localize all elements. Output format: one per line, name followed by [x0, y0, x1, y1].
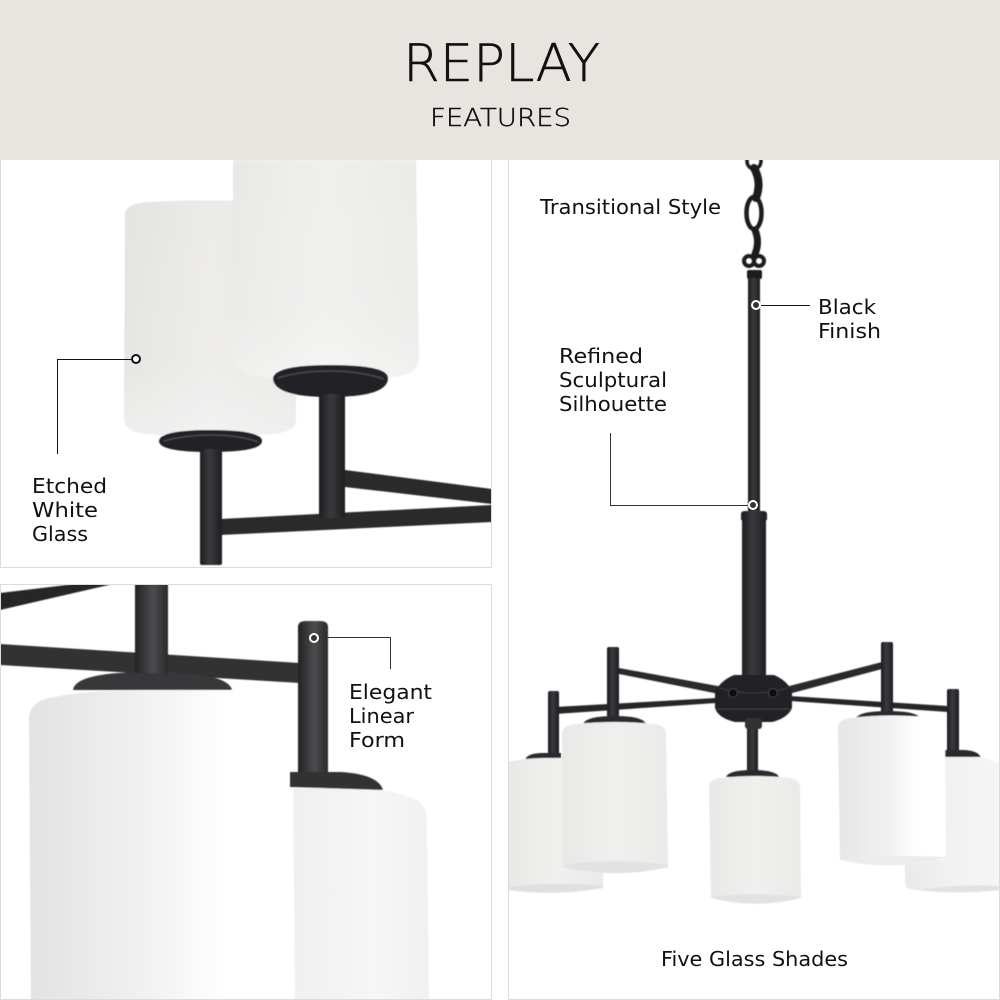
lower stem: [741, 511, 767, 680]
panel: header band: [0, 0, 1000, 160]
center stem: [135, 580, 168, 673]
rear glass shade: [124, 200, 296, 438]
callout line: finish: [761, 304, 810, 306]
left glass shade: [28, 689, 232, 999]
horizontal arm: [0, 644, 300, 683]
far right post and shade: [947, 689, 959, 752]
label: refined sculptural silhouette: Silhouette: [559, 392, 667, 416]
far left post and shade: [548, 691, 559, 755]
inner right post and shade: [881, 642, 893, 713]
hub: [715, 675, 792, 722]
chandelier illustration: [508, 153, 1000, 904]
callout line: form: [319, 638, 390, 669]
label: etched white glass: [32, 474, 107, 546]
label: black finish: Black: [818, 295, 876, 319]
center post and shade: [747, 728, 758, 772]
collar: [747, 270, 762, 279]
front cup: [273, 365, 388, 397]
diagonal rear arm: [0, 584, 113, 610]
label: etched white glass: White: [32, 498, 98, 522]
label: refined sculptural silhouette: Refined: [559, 344, 643, 368]
rear cup: [159, 430, 262, 452]
label: refined sculptural silhouette: Sculptural: [559, 368, 667, 392]
right post: [298, 621, 328, 772]
right cup: [290, 772, 383, 790]
right glass shade: [293, 788, 429, 1000]
lower arm: [218, 505, 492, 535]
label: etched white glass: Etched: [32, 474, 107, 498]
label: five glass shades: Five Glass Shades: [661, 947, 848, 971]
arm sockets: [728, 688, 738, 698]
label: black finish: Finish: [818, 319, 881, 343]
label: elegant linear form: Elegant: [349, 680, 432, 704]
panel: full chandelier: [508, 153, 1000, 1000]
callout dot: silhouette: [749, 501, 757, 509]
upper arm: [345, 470, 492, 504]
label: etched white glass: Glass: [32, 522, 88, 546]
panel: elegant linear form detail: [0, 580, 492, 1000]
inner left post and shade: [607, 647, 619, 717]
front glass shade: [233, 160, 419, 382]
panel: etched white glass detail: [0, 160, 492, 568]
label: elegant linear form: Linear: [349, 704, 415, 728]
chain: [744, 153, 764, 266]
callout dot: finish: [752, 301, 760, 309]
label: elegant linear form: Form: [349, 728, 405, 752]
upper arms: [618, 667, 719, 694]
callout line: silhouette: [610, 433, 748, 506]
subtitle: FEATURES: [430, 103, 571, 132]
label: transitional style: Transitional Style: [539, 195, 721, 219]
far arms: [555, 698, 716, 714]
label: black finish: [818, 295, 881, 343]
label: elegant linear form: [349, 680, 432, 752]
callout line: glass: [58, 360, 131, 454]
callout dot: form: [310, 634, 318, 642]
center knob: [745, 718, 762, 729]
upper rod: [748, 278, 760, 512]
title: REPLAY: [403, 34, 600, 94]
left cup: [73, 672, 232, 690]
callout dot: glass: [132, 355, 140, 363]
front stem: [319, 394, 345, 518]
rear stem: [200, 449, 222, 565]
label: refined sculptural silhouette: [559, 344, 667, 416]
